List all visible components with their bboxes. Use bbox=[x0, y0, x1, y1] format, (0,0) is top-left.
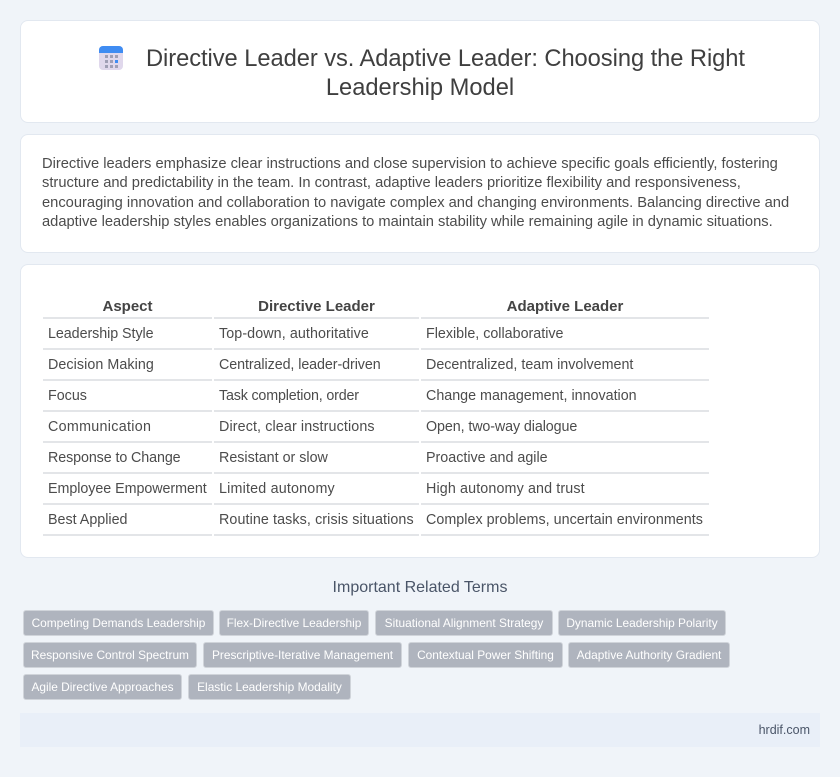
title: Leadership Model bbox=[326, 75, 514, 101]
title bbox=[146, 46, 745, 101]
icon: calendar bbox=[99, 46, 123, 70]
related term tags: Competing Demands Leadership bbox=[32, 616, 205, 630]
row: focus: Task completion, order bbox=[219, 388, 359, 404]
related term tags: Prescriptive-Iterative Management bbox=[212, 648, 393, 662]
summary text: Directive leaders emphasize clear instructions and close supervision to achieve specific goals efficiently, fostering bbox=[42, 156, 778, 172]
related term tags: Elastic Leadership Modality bbox=[197, 680, 342, 694]
panel: summary bbox=[20, 134, 820, 253]
row: focus: Change management, innovation bbox=[426, 388, 637, 404]
related term tags: Situational Alignment Strategy bbox=[385, 616, 543, 630]
row: employee empowerment: Employee Empowerment bbox=[48, 481, 207, 497]
row: best applied bbox=[48, 512, 703, 528]
related term tags: Dynamic Leadership Polarity bbox=[566, 616, 718, 630]
row: leadership style bbox=[48, 326, 563, 342]
row: focus bbox=[48, 388, 637, 404]
row: leadership style: Leadership Style bbox=[48, 326, 154, 342]
row: leadership style: Top-down, authoritative bbox=[219, 326, 369, 342]
footer source: hrdif.com bbox=[759, 723, 810, 737]
table header bbox=[102, 298, 624, 315]
row: best applied: Best Applied bbox=[48, 512, 127, 528]
row: best applied: Complex problems, uncertain environments bbox=[426, 512, 703, 528]
row: focus: Focus bbox=[48, 388, 87, 404]
related term tags: Agile Directive Approaches bbox=[31, 680, 174, 694]
row: employee empowerment bbox=[48, 481, 585, 497]
related term tags: Adaptive Authority Gradient bbox=[577, 648, 721, 662]
title: Directive Leader vs. Adaptive Leader: Choosing the Right bbox=[146, 46, 745, 72]
related term tags bbox=[23, 610, 730, 700]
row: response to change bbox=[48, 450, 548, 466]
table header: Aspect bbox=[102, 298, 153, 315]
comparison table bbox=[43, 298, 709, 536]
related term tags: Responsive Control Spectrum bbox=[31, 648, 189, 662]
summary text: encouraging innovation and collaboration to navigate complex and changing environments. Balancing directive and bbox=[42, 195, 789, 211]
related term tags: Contextual Power Shifting bbox=[417, 648, 554, 662]
row: decision making: Centralized, leader-driven bbox=[219, 357, 381, 373]
footer bbox=[20, 713, 820, 747]
summary text: structure and predictability in the team. In contrast, adaptive leaders prioritize flexibility and responsiveness, bbox=[42, 175, 741, 191]
row: response to change: Proactive and agile bbox=[426, 450, 548, 466]
row: communication: Open, two-way dialogue bbox=[426, 419, 577, 435]
summary text: adaptive leadership styles enables organizations to maintain stability while remaining agile in dynamic situations. bbox=[42, 214, 773, 230]
row: communication bbox=[48, 419, 577, 435]
row: decision making: Decision Making bbox=[48, 357, 154, 373]
related term tags: Flex-Directive Leadership bbox=[227, 616, 361, 630]
panel: title card bbox=[20, 20, 820, 123]
table header: Directive Leader bbox=[258, 298, 375, 315]
row: decision making: Decentralized, team involvement bbox=[426, 357, 633, 373]
panel: comparison table bbox=[20, 264, 820, 558]
row: leadership style: Flexible, collaborative bbox=[426, 326, 563, 342]
summary text bbox=[42, 156, 789, 230]
row: employee empowerment: Limited autonomy bbox=[219, 481, 335, 497]
heading: related terms: Important Related Terms bbox=[333, 579, 507, 596]
row: response to change: Resistant or slow bbox=[219, 450, 328, 466]
row: response to change: Response to Change bbox=[48, 450, 181, 466]
table header: Adaptive Leader bbox=[507, 298, 623, 315]
row: best applied: Routine tasks, crisis situations bbox=[219, 512, 414, 528]
row: employee empowerment: High autonomy and trust bbox=[426, 481, 585, 497]
row: communication: Direct, clear instructions bbox=[219, 419, 375, 435]
row: decision making bbox=[48, 357, 634, 373]
row: communication: Communication bbox=[48, 419, 151, 435]
